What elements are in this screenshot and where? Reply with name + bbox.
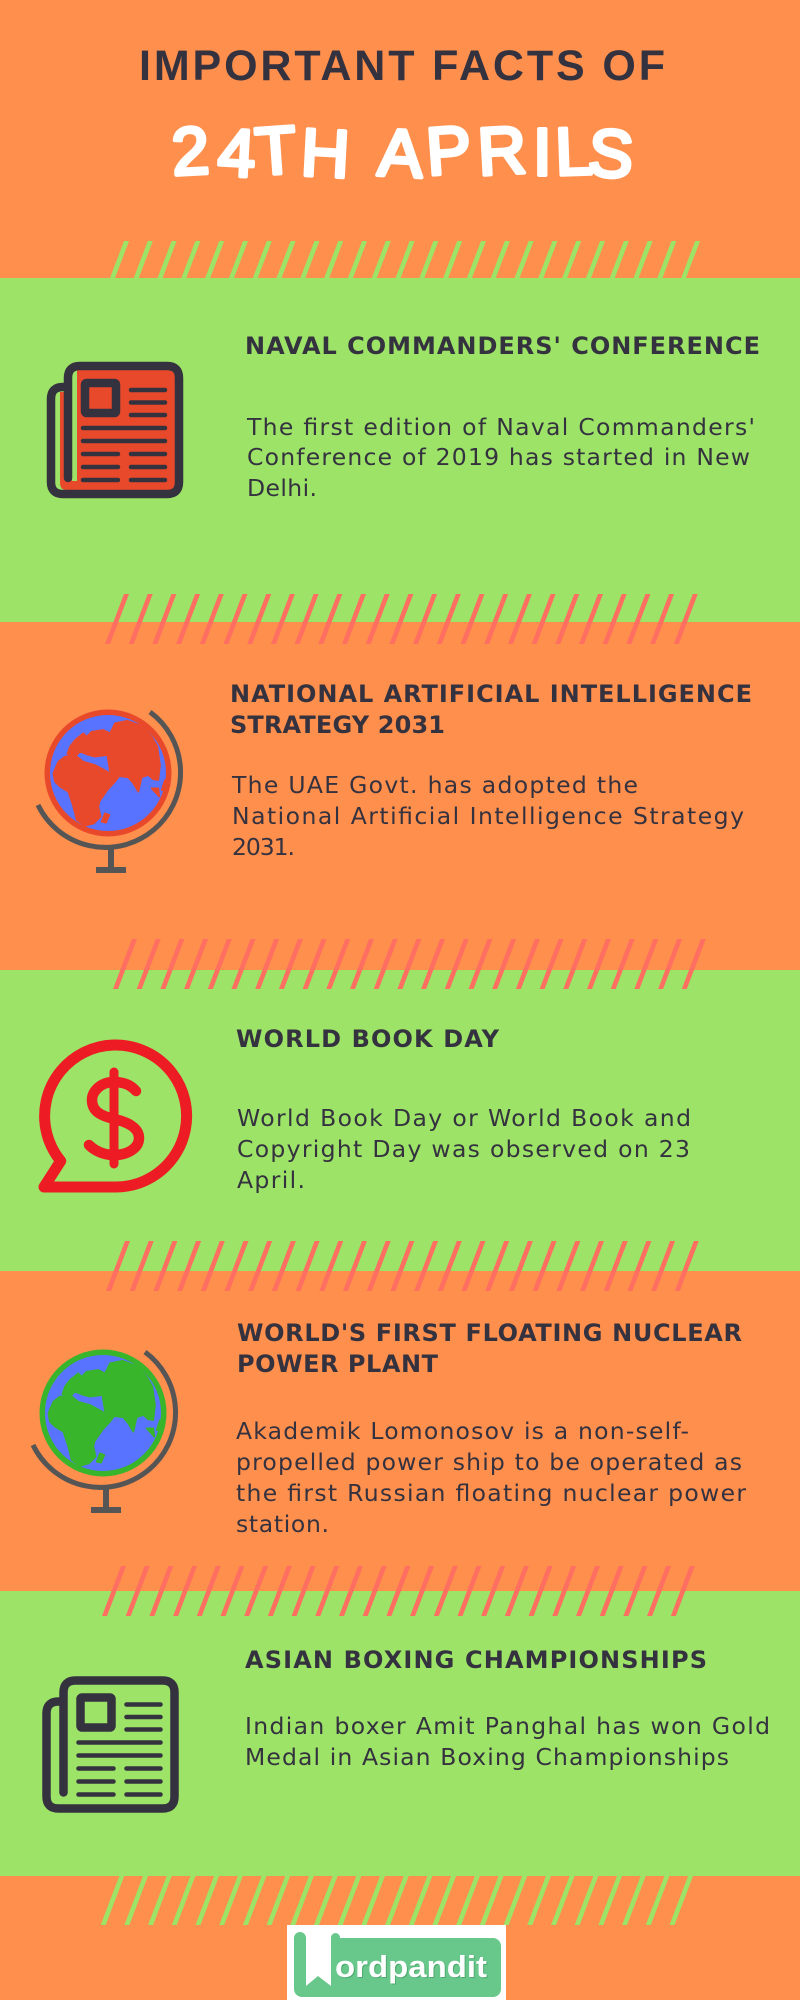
body text: Medal in Asian Boxing Championships [245, 1743, 729, 1771]
body text: 2031. [232, 833, 295, 861]
logo: wordpandit [287, 1925, 506, 2000]
heading: POWER PLANT [237, 1350, 439, 1378]
icon: red newspaper [51, 366, 179, 494]
panel: world book day [44, 1025, 691, 1194]
panel: national AI strategy [38, 680, 752, 870]
body text: Copyright Day was observed on 23 [237, 1135, 690, 1163]
body text: Delhi. [247, 474, 317, 502]
body text [236, 1417, 746, 1538]
panel: floating nuclear power plant [33, 1319, 746, 1538]
title: IMPORTANT FACTS OF [139, 42, 665, 90]
heading: NAVAL COMMANDERS' CONFERENCE [245, 332, 760, 360]
body text [237, 1104, 691, 1194]
body text: propelled power ship to be operated as [236, 1448, 742, 1476]
body text: April. [237, 1166, 305, 1194]
body text: World Book Day or World Book and [237, 1104, 691, 1132]
heading: NATIONAL ARTIFICIAL INTELLIGENCE [230, 680, 752, 708]
icon: dollar speech bubble [44, 1045, 187, 1187]
body text: Indian boxer Amit Panghal has won Gold [245, 1712, 770, 1740]
icon: globe green [33, 1350, 176, 1510]
logo: wordpandit: ordpandit [336, 1950, 488, 1985]
subtitle: 24th Aprils: 24TH APRILS [170, 112, 636, 193]
body text: The UAE Govt. has adopted the [231, 771, 638, 799]
heading: WORLD'S FIRST FLOATING NUCLEAR [237, 1319, 742, 1347]
heading: ASIAN BOXING CHAMPIONSHIPS [245, 1646, 707, 1674]
body text [246, 413, 755, 502]
icon: dark newspaper [46, 1680, 174, 1808]
heading [237, 1319, 742, 1378]
body text: Conference of 2019 has started in New [247, 443, 750, 471]
panel: naval commanders conference [51, 332, 760, 502]
logo: wordpandit: ordpandit [335, 1949, 487, 1984]
body text: station. [236, 1510, 329, 1538]
panel: asian boxing championships [46, 1646, 770, 1808]
body text [245, 1712, 770, 1771]
body text: the first Russian floating nuclear power [236, 1479, 746, 1507]
body text: National Artificial Intelligence Strategy [232, 802, 744, 830]
heading: WORLD BOOK DAY [236, 1025, 500, 1053]
body text: The first edition of Naval Commanders' [246, 413, 755, 441]
body text [231, 771, 744, 861]
body text: Akademik Lomonosov is a non-self- [236, 1417, 689, 1445]
icon: globe orange-red [38, 710, 181, 870]
heading [230, 680, 752, 739]
heading: STRATEGY 2031 [230, 711, 445, 739]
